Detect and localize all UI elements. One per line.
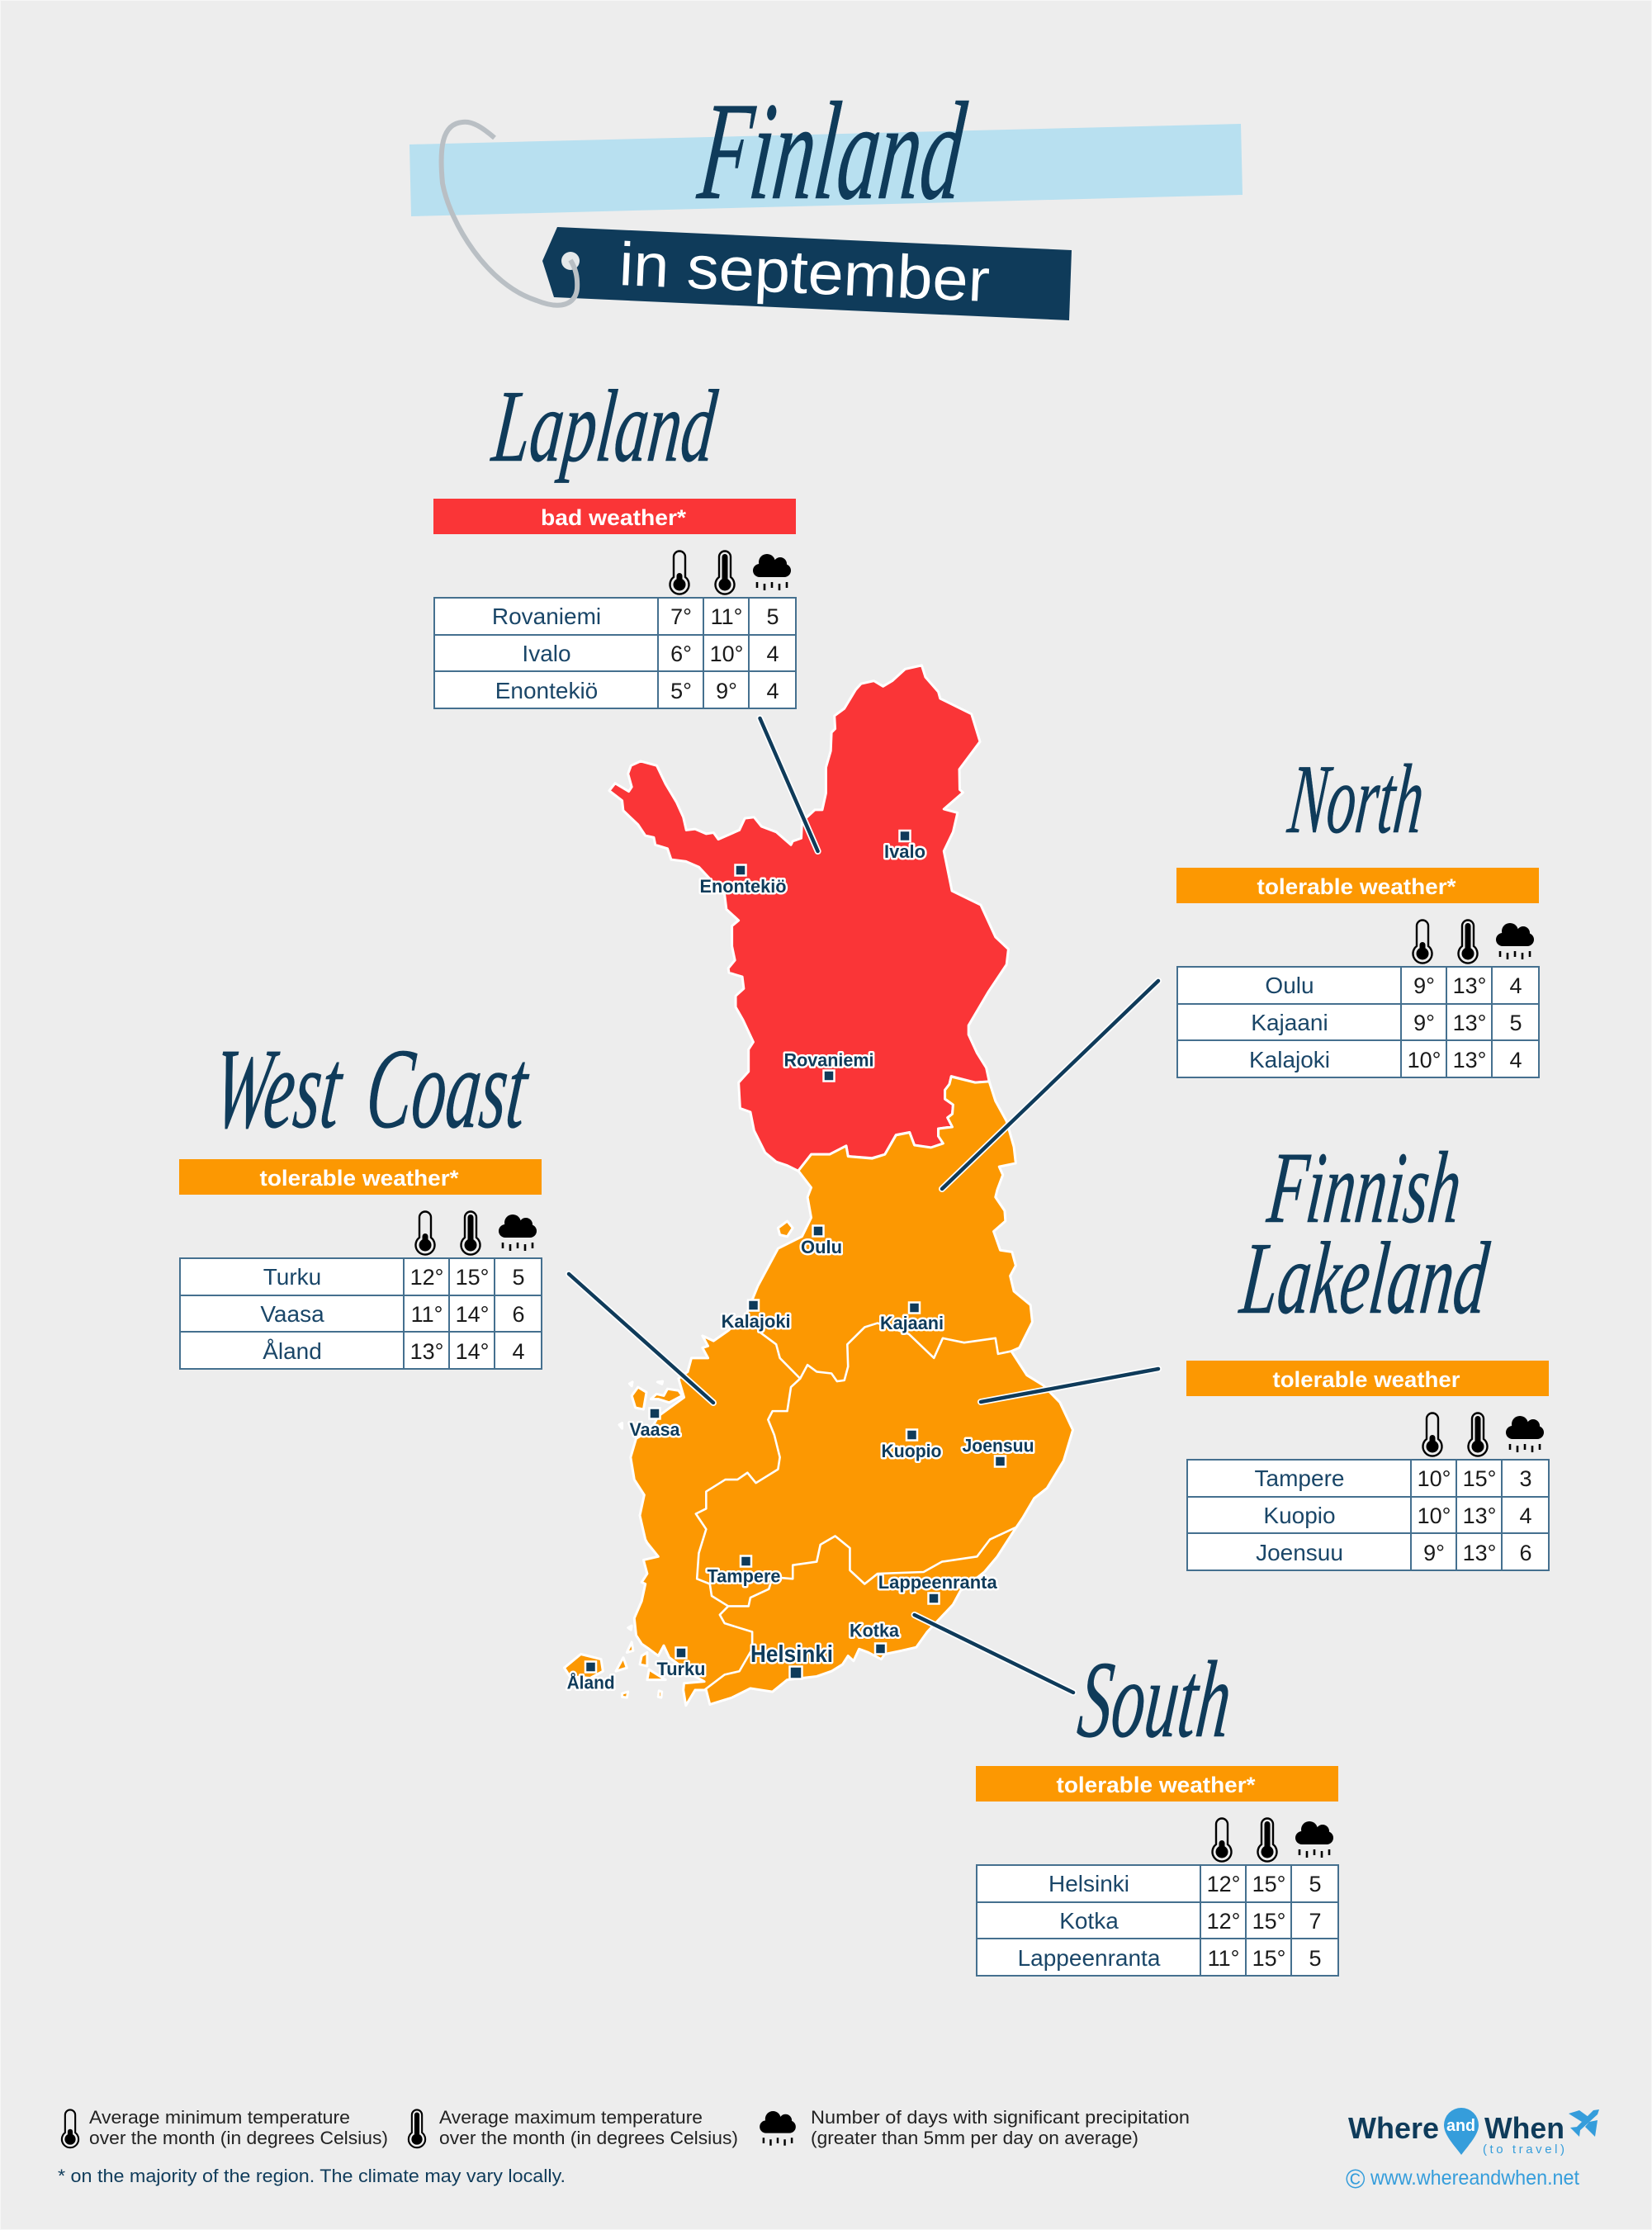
table rows: Rovaniemi: [492, 604, 601, 629]
table rows: 13°: [410, 1339, 443, 1364]
table rows: 5: [512, 1265, 525, 1290]
heading: Finnish Lakeland: Lakeland: [1235, 1221, 1493, 1336]
table rows: 12°: [410, 1265, 443, 1290]
arrow: Finnish Lakeland leader: [981, 1369, 1158, 1402]
panel: Finnish Lakeland: [1186, 1130, 1549, 1570]
table rows: [977, 1865, 1338, 1976]
city: Kalajoki: Kalajoki: [722, 1311, 791, 1332]
table rows: 4: [766, 679, 779, 703]
table rows: 15°: [1252, 1909, 1285, 1934]
logo wordmark Where: Where: [1348, 2111, 1439, 2145]
logo: Where and When: [1346, 2108, 1599, 2194]
title block: Finland in september: [409, 73, 1243, 320]
arrow: South leader: [915, 1615, 1073, 1693]
weather table: North: [1176, 868, 1539, 1077]
table rows: Kotka: [1059, 1908, 1119, 1934]
table rows: Enontekiö: [495, 678, 598, 703]
city: Lappeenranta: Lappeenranta: [878, 1572, 997, 1593]
website: ©: [1346, 2164, 1366, 2194]
city: Lappeenranta: [878, 1572, 997, 1603]
legend item: precipitation: Number of days with significant precipitation: [811, 2107, 1190, 2128]
table rows: Helsinki: [1048, 1871, 1129, 1896]
city: Helsinki: [750, 1641, 833, 1679]
panel: North: [1176, 745, 1539, 1077]
table rows: [180, 1258, 542, 1369]
subtitle: in september: in september: [618, 230, 992, 315]
panel: West Coast: [179, 1025, 542, 1369]
legend item: maximum temperature: Average maximum temperature: [439, 2107, 703, 2128]
city: Tampere: Tampere: [707, 1565, 781, 1587]
table rows: Joensuu: [1256, 1540, 1343, 1565]
table rows: 13°: [1453, 1048, 1486, 1072]
heading: Lapland: Lapland: [487, 369, 722, 484]
table rows: 13°: [1463, 1541, 1496, 1565]
table rows: 13°: [1453, 973, 1486, 998]
table rows: 10°: [710, 642, 743, 666]
city: Rovaniemi: Rovaniemi: [784, 1050, 873, 1070]
banner: tolerable weather: tolerable weather*: [1057, 1773, 1256, 1797]
table rows: 9°: [1413, 1011, 1435, 1035]
table rows: 7°: [670, 604, 692, 629]
city: Helsinki: Helsinki: [750, 1641, 833, 1668]
table rows: 10°: [1408, 1048, 1441, 1072]
luggage tag: [542, 227, 1072, 320]
panel: South: [976, 1638, 1338, 1976]
table rows: Ivalo: [522, 641, 571, 666]
panel: Lapland: [433, 369, 796, 708]
legend item: precipitation: (greater than 5mm per day on average): [811, 2128, 1138, 2148]
table rows: 9°: [1423, 1541, 1445, 1565]
legend item: maximum temperature: over the month (in degrees Celsius): [439, 2128, 738, 2148]
banner: tolerable weather: tolerable weather*: [259, 1166, 459, 1191]
heading: West Coast: West Coast: [208, 1025, 535, 1153]
table rows: 7: [1309, 1909, 1322, 1934]
table rows: 6: [1519, 1541, 1532, 1565]
table rows: Kajaani: [1251, 1010, 1328, 1035]
table rows: Vaasa: [260, 1301, 324, 1327]
weather table: Finnish Lakeland: [1186, 1361, 1549, 1570]
city: Kotka: [850, 1620, 900, 1655]
table rows: 5°: [670, 679, 692, 703]
banner: bad weather: bad weather*: [541, 505, 687, 530]
banner: tolerable weather: tolerable weather: [1273, 1367, 1460, 1392]
table rows: 11°: [411, 1302, 443, 1327]
legend item: minimum temperature: [62, 2107, 388, 2148]
table rows: 9°: [716, 679, 737, 703]
city: Kajaani: [880, 1303, 944, 1333]
banner: bad weather: [433, 499, 796, 534]
logo pin with and: [1444, 2108, 1479, 2155]
legend: [58, 2107, 1190, 2186]
banner: tolerable weather: tolerable weather*: [1257, 874, 1456, 899]
table rows: Tampere: [1255, 1465, 1344, 1491]
weather table: South: [976, 1766, 1338, 1976]
table rows: 11°: [1208, 1946, 1239, 1971]
table rows: 5: [1309, 1946, 1322, 1971]
city: Kajaani: Kajaani: [880, 1313, 944, 1333]
legend item: maximum temperature: [409, 2107, 738, 2148]
table rows: Lappeenranta: [1018, 1945, 1161, 1971]
icons: min, max, rain: [670, 552, 791, 594]
table rows: 3: [1519, 1466, 1532, 1491]
icons: min, max, rain: [416, 1212, 537, 1255]
arrow: West Coast leader: [569, 1274, 713, 1403]
logo pin with and: and: [1446, 2117, 1475, 2135]
table rows: Turku: [263, 1264, 321, 1290]
footnote: * on the majority of the region. The climate may vary locally.: [58, 2166, 566, 2186]
banner: tolerable weather: [179, 1159, 542, 1195]
logo tagline: (to travel): [1483, 2142, 1564, 2157]
table rows: 9°: [1413, 973, 1435, 998]
city: Joensuu: Joensuu: [963, 1435, 1034, 1456]
table rows: 4: [1509, 1048, 1522, 1072]
city: Rovaniemi: [784, 1050, 873, 1082]
table rows: 5: [1509, 1011, 1522, 1035]
table rows: 5: [766, 604, 779, 629]
city: Ivalo: [884, 831, 925, 862]
region: Lapland: [609, 665, 1008, 1171]
website: [1346, 2164, 1579, 2194]
weather table: West Coast: [179, 1159, 542, 1369]
legend item: minimum temperature: over the month (in degrees Celsius): [89, 2128, 388, 2148]
table rows: 13°: [1453, 1011, 1486, 1035]
table rows: [1177, 967, 1539, 1077]
map of Finland: [564, 665, 1073, 1706]
title ribbon: [409, 124, 1243, 216]
city: Oulu: [801, 1225, 842, 1257]
city: Kotka: Kotka: [850, 1620, 900, 1641]
legend item: precipitation: [760, 2107, 1190, 2148]
table rows: 10°: [1418, 1503, 1451, 1528]
website: www.whereandwhen.net: [1370, 2166, 1579, 2190]
table rows: Kalajoki: [1249, 1047, 1330, 1072]
table rows: 12°: [1207, 1872, 1240, 1896]
table rows: 6°: [670, 642, 692, 666]
icons: min, max, rain: [1212, 1818, 1333, 1862]
table rows: 15°: [1463, 1466, 1496, 1491]
table rows: 4: [766, 642, 779, 666]
city: Åland: Åland: [567, 1671, 615, 1693]
tag hole: [561, 252, 580, 270]
weather table: Lapland: [433, 499, 796, 708]
heading: Finnish Lakeland: Finnish: [1263, 1130, 1467, 1244]
city: Tampere: [707, 1555, 781, 1587]
table rows: 5: [1309, 1872, 1322, 1896]
tag string: [442, 122, 577, 305]
city: Kuopio: Kuopio: [882, 1441, 941, 1461]
banner: tolerable weather: [976, 1766, 1338, 1802]
table rows: 15°: [1252, 1946, 1285, 1971]
table rows: Kuopio: [1263, 1503, 1336, 1528]
table rows: 4: [1519, 1503, 1532, 1528]
city: Vaasa: Vaasa: [629, 1419, 680, 1440]
city: Turku: Turku: [657, 1659, 705, 1679]
banner: tolerable weather: [1186, 1361, 1549, 1396]
city: Enontekiö: [700, 865, 786, 897]
icon: plane: [1569, 2109, 1599, 2137]
city: Joensuu: [963, 1435, 1034, 1466]
city: Oulu: Oulu: [801, 1237, 842, 1257]
table rows: Åland: [263, 1338, 322, 1364]
logo wordmark When: When: [1484, 2111, 1564, 2145]
table rows: 11°: [711, 604, 742, 629]
table rows: 15°: [456, 1265, 489, 1290]
city: Turku: [657, 1648, 705, 1679]
arrow: Lapland leader: [760, 718, 818, 851]
table rows: 10°: [1418, 1466, 1451, 1491]
legend item: minimum temperature: Average minimum temperature: [89, 2107, 350, 2128]
icons: min, max, rain: [1413, 920, 1534, 963]
table rows: 15°: [1252, 1872, 1285, 1896]
table rows: 14°: [456, 1302, 489, 1327]
table rows: 13°: [1463, 1503, 1496, 1528]
table rows: 12°: [1207, 1909, 1240, 1934]
city: Vaasa: [629, 1409, 680, 1440]
city: Enontekiö: Enontekiö: [700, 876, 786, 897]
city: Kuopio: [882, 1430, 941, 1461]
heading: Finnish Lakeland: [1235, 1130, 1493, 1336]
title: Finland: Finland: [693, 73, 972, 229]
table rows: [1187, 1460, 1549, 1570]
icons: min, max, rain: [1423, 1413, 1544, 1456]
arrow: North leader: [942, 981, 1158, 1189]
table rows: 4: [512, 1339, 525, 1364]
table rows: 6: [512, 1302, 525, 1327]
city: Kalajoki: [722, 1300, 791, 1332]
city: Åland: [567, 1661, 615, 1693]
heading: South: South: [1073, 1638, 1237, 1760]
table rows: [434, 598, 796, 708]
table rows: 14°: [456, 1339, 489, 1364]
city: Ivalo: Ivalo: [884, 841, 925, 862]
regions: North, West Coast, Finnish Lakeland, South: [564, 1077, 1073, 1706]
table rows: 4: [1509, 973, 1522, 998]
banner: tolerable weather: [1176, 868, 1539, 903]
heading: North: North: [1284, 745, 1429, 855]
table rows: Oulu: [1265, 973, 1314, 998]
